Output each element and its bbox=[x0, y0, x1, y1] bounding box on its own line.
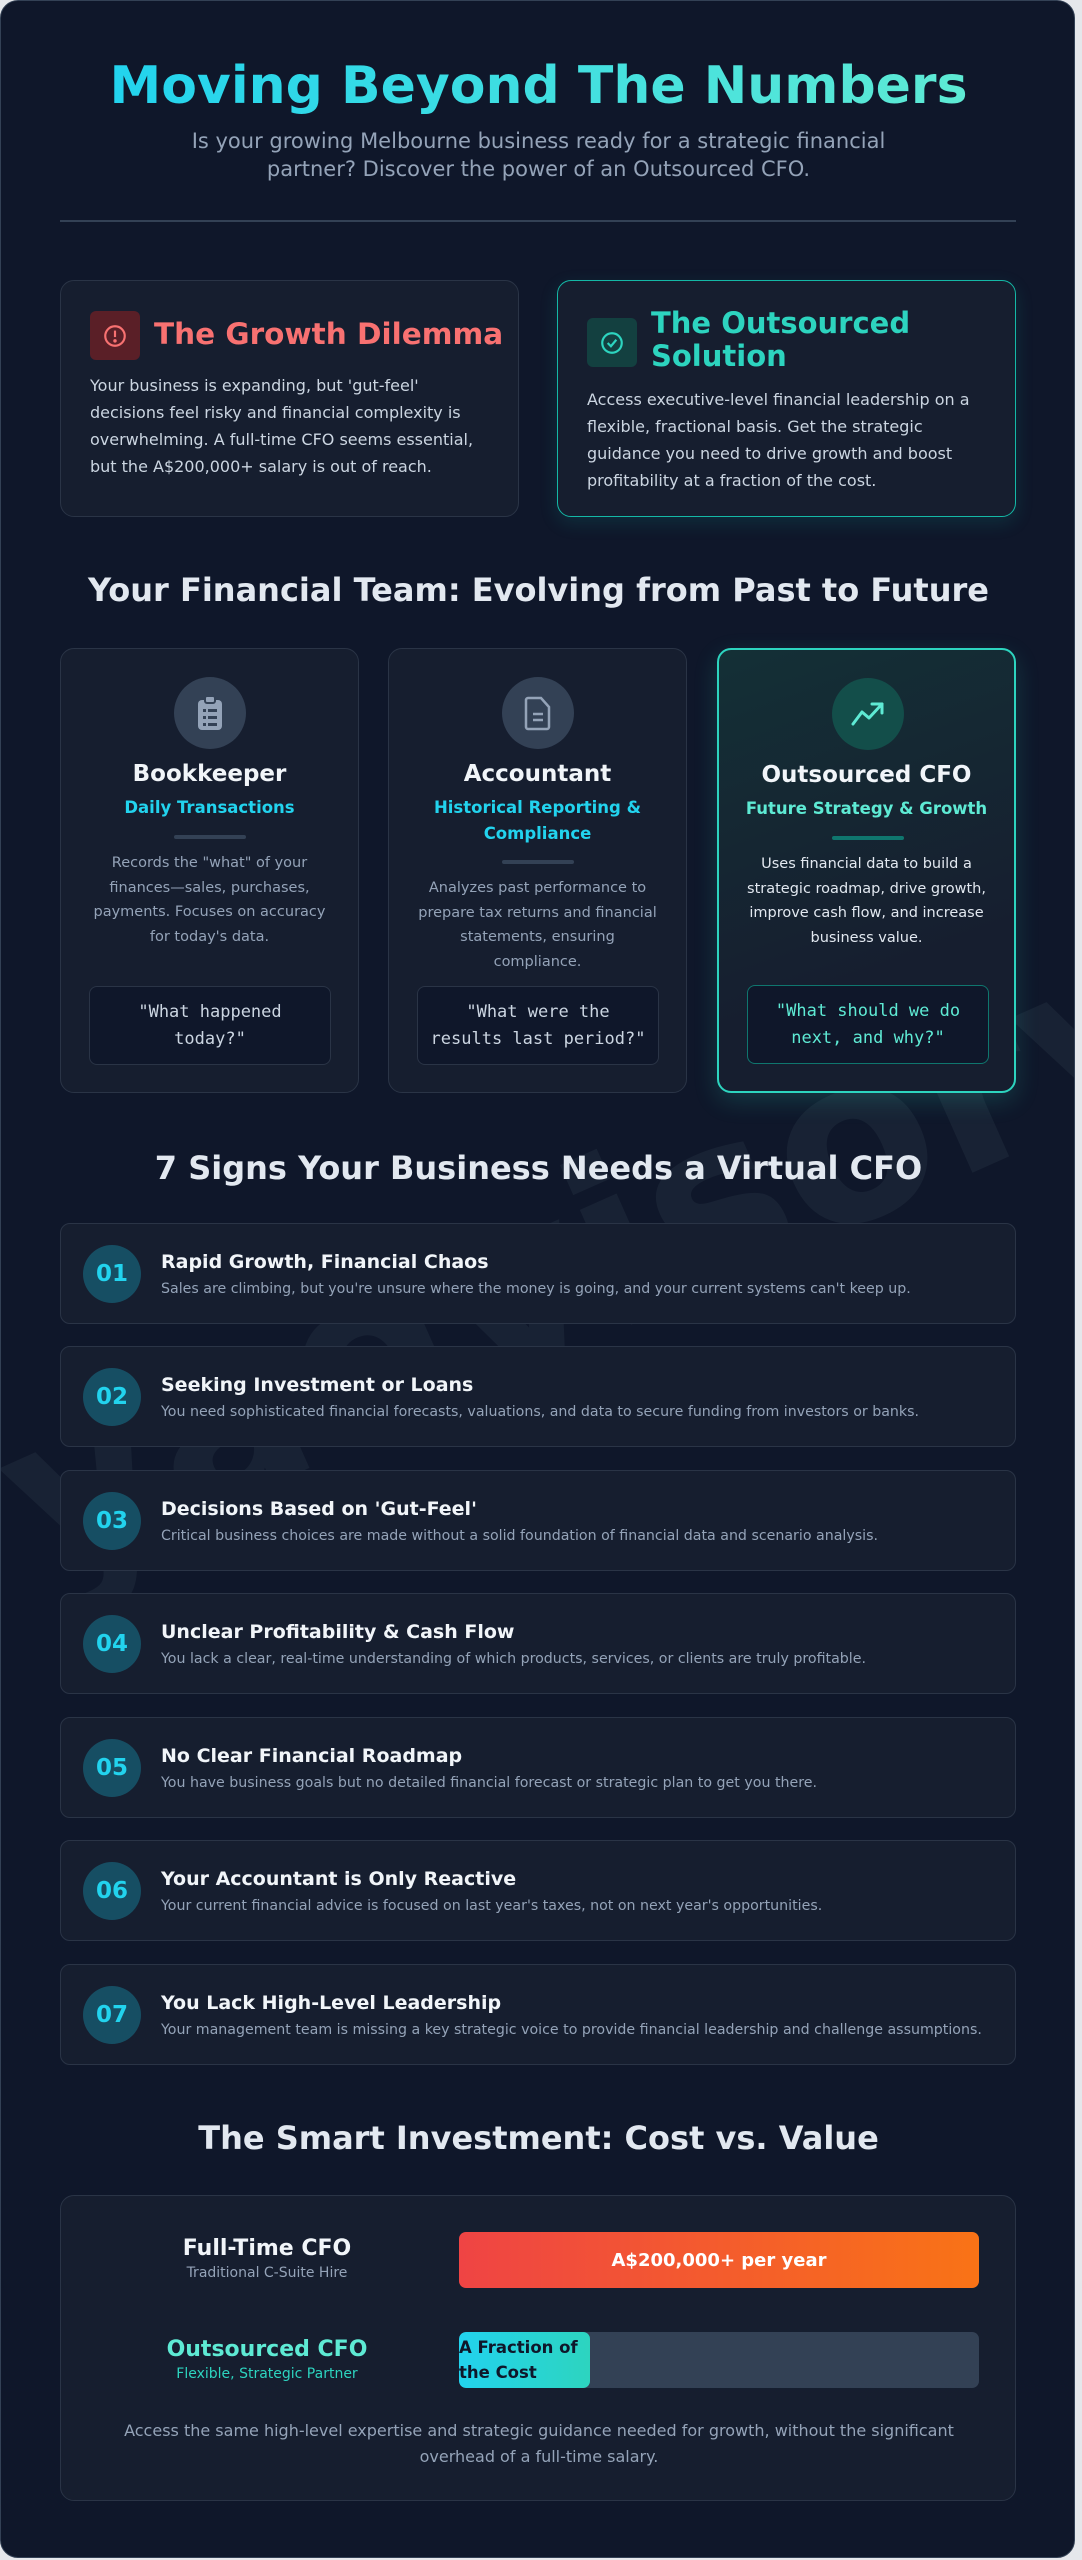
sign 03: 03 bbox=[96, 1508, 128, 1534]
sign 05: You have business goals but no detailed financial forecast or strategic plan to get you there. bbox=[161, 1775, 817, 1791]
sign 07: Your management team is missing a key strategic voice to provide financial leadership and challenge assumptions. bbox=[161, 2022, 982, 2038]
panel: bookkeeper: Bookkeeper bbox=[133, 761, 286, 787]
sign 06 bbox=[60, 1840, 1016, 1941]
label: outsourced bbox=[167, 2337, 367, 2382]
quote: next, and why?" bbox=[791, 1028, 945, 1048]
sign 06: 06 bbox=[96, 1878, 128, 1904]
sign 04: Unclear Profitability & Cash Flow bbox=[161, 1621, 514, 1643]
panel: accountant: Analyzes past performance to prepare tax returns and financial statements, ensuring compliance. bbox=[418, 880, 657, 970]
icon: trending up bbox=[832, 678, 904, 750]
panel: accountant: Historical Reporting & Compliance bbox=[434, 798, 641, 843]
sign 01: 01 bbox=[96, 1261, 128, 1287]
sign 01: Rapid Growth, Financial Chaos bbox=[161, 1251, 489, 1273]
label: outsourced: Outsourced CFO bbox=[167, 2337, 367, 2362]
quote: results last period?" bbox=[431, 1028, 645, 1048]
sign 01 bbox=[60, 1223, 1016, 1324]
sign 04: You lack a clear, real-time understanding of which products, services, or clients are truly profitable. bbox=[161, 1651, 866, 1667]
sign 02: Seeking Investment or Loans bbox=[161, 1374, 473, 1396]
sign 06: Your Accountant is Only Reactive bbox=[161, 1868, 516, 1890]
sign 07: 07 bbox=[96, 2002, 128, 2028]
sign 03: Decisions Based on 'Gut-Feel' bbox=[161, 1498, 477, 1520]
sign 06: Your current financial advice is focused on last year's taxes, not on next year's opportunities. bbox=[161, 1898, 822, 1914]
panel: cost comparison bbox=[60, 2195, 1016, 2501]
bar: full-time cost: A$200,000+ per year bbox=[612, 2250, 826, 2270]
heading: 7 signs: 7 Signs Your Business Needs a Virtual CFO bbox=[155, 1149, 922, 1187]
heading: smart investment: The Smart Investment: Cost vs. Value bbox=[198, 2119, 879, 2157]
quote bbox=[747, 985, 989, 1064]
bar: full-time cost bbox=[459, 2232, 979, 2288]
sign 02 bbox=[60, 1346, 1016, 1447]
sign 02: 02 bbox=[96, 1384, 128, 1410]
sign 05 bbox=[60, 1717, 1016, 1818]
sign 07 bbox=[60, 1964, 1016, 2065]
heading bbox=[651, 306, 910, 373]
sign 03 bbox=[60, 1470, 1016, 1571]
heading: financial team: Your Financial Team: Evolving from Past to Future bbox=[88, 571, 989, 609]
panel: bookkeeper: Daily Transactions bbox=[124, 798, 295, 817]
panel: bookkeeper bbox=[60, 648, 359, 1093]
panel: outsourced cfo bbox=[717, 648, 1016, 1093]
icon: clipboard bbox=[174, 677, 246, 749]
sign 05: 05 bbox=[96, 1755, 128, 1781]
label: full-time: Traditional C-Suite Hire bbox=[187, 2265, 347, 2281]
panel: bookkeeper: Records the "what" of your finances—sales, purchases, payments. Focuses on accuracy for today's data. bbox=[94, 855, 325, 944]
sign 05: No Clear Financial Roadmap bbox=[161, 1745, 462, 1767]
panel: outsourced cfo: Future Strategy & Growth bbox=[746, 799, 987, 818]
sign 04: 04 bbox=[96, 1631, 128, 1657]
text: summary: Access the same high-level expertise and strategic guidance needed for growth, without the significant overhead of a full-time salary. bbox=[124, 2421, 954, 2466]
heading: Solution bbox=[651, 339, 787, 373]
icon: alert bbox=[90, 311, 140, 360]
quote bbox=[417, 986, 659, 1065]
panel: outsourced solution bbox=[557, 280, 1016, 517]
heading: The Growth Dilemma bbox=[154, 317, 503, 351]
sign 07: You Lack High-Level Leadership bbox=[161, 1992, 501, 2014]
label: full-time bbox=[183, 2236, 351, 2281]
quote: "What happened bbox=[138, 1002, 282, 1022]
sign 03: Critical business choices are made without a solid foundation of financial data and scenario analysis. bbox=[161, 1528, 878, 1544]
quote: "What were the bbox=[466, 1002, 610, 1022]
icon: check bbox=[587, 318, 637, 367]
sign 02: You need sophisticated financial forecasts, valuations, and data to secure funding from investors or banks. bbox=[161, 1404, 919, 1420]
subtitle: Is your growing Melbourne business ready for a strategic financial partner? Discover the power of an Outsourced CFO. bbox=[192, 129, 885, 181]
panel: accountant: Accountant bbox=[464, 761, 611, 787]
text: Access executive-level financial leadership on a flexible, fractional basis. Get the strategic guidance you need to drive growth and boost profitability at a fraction of the cost. bbox=[587, 390, 970, 490]
panel: growth dilemma bbox=[60, 280, 519, 517]
heading: The Outsourced bbox=[651, 306, 910, 340]
label: full-time: Full-Time CFO bbox=[183, 2236, 351, 2261]
panel: accountant bbox=[388, 648, 687, 1093]
text: Your business is expanding, but 'gut-feel' decisions feel risky and financial complexity is overwhelming. A full-time CFO seems essential, but the A$200,000+ salary is out of reach. bbox=[90, 376, 473, 476]
bar: outsourced cost: A Fraction of the Cost bbox=[459, 2338, 578, 2382]
sign 04 bbox=[60, 1593, 1016, 1694]
quote: today?" bbox=[174, 1028, 246, 1048]
quote: "What should we do bbox=[776, 1000, 960, 1020]
label: outsourced: Flexible, Strategic Partner bbox=[176, 2366, 358, 2382]
panel: outsourced cfo: Outsourced CFO bbox=[762, 762, 971, 788]
sign 01: Sales are climbing, but you're unsure where the money is going, and your current systems can't keep up. bbox=[161, 1281, 911, 1297]
panel: outsourced cfo: Uses financial data to build a strategic roadmap, drive growth, improve cash flow, and increase business value. bbox=[747, 856, 986, 946]
icon: document bbox=[502, 677, 574, 749]
bar: outsourced cost bbox=[459, 2332, 979, 2388]
title: Moving Beyond The Numbers bbox=[109, 56, 968, 116]
quote bbox=[89, 986, 331, 1065]
